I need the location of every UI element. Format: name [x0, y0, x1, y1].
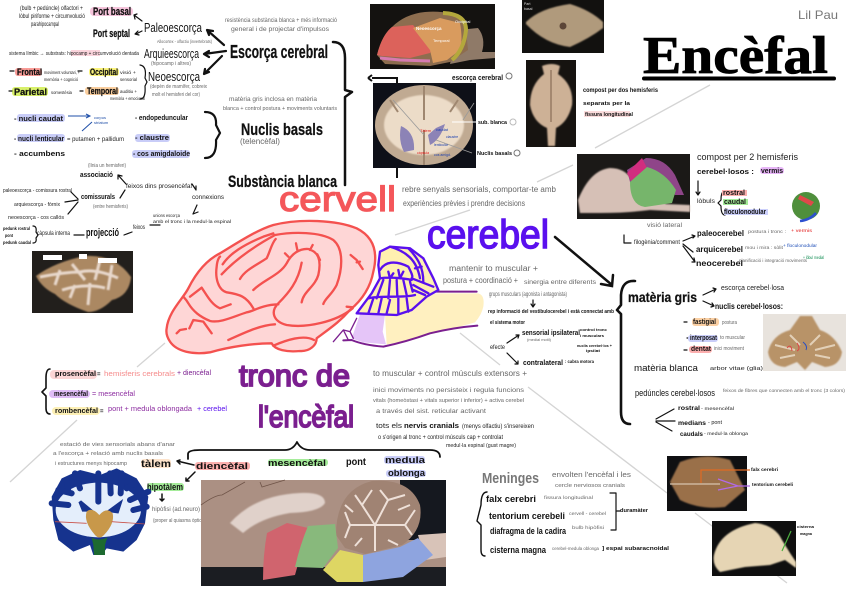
text: cerebel composició: rostral [723, 190, 745, 197]
panel: nuclis basals: - nucli caudat [14, 116, 64, 123]
cerebellum illustration [357, 247, 438, 315]
panel: substància blanca connexions: connexions [192, 195, 224, 201]
image: lateral brain [712, 521, 815, 576]
panel: matèria cerebel: feixos de fibres que connecten amb el tronc (3 colors) [723, 388, 846, 393]
panel: divisions encèfal: mesencèfal [54, 391, 88, 398]
arrow: coronal section connector [368, 75, 397, 178]
panel: escorça cerebral: Paleoescorça [144, 20, 203, 35]
panel: substància blanca connexions: feixos [133, 225, 145, 231]
image: lateral brain cortex colours: Neoescorça [416, 26, 442, 31]
text: filogènia: arquicerebel [696, 244, 743, 254]
panel: escorça cerebral: sistema límbic → substrats: hipocamp + circumvolució dentada [9, 51, 140, 57]
panel: escorça cerebral [9, 6, 338, 101]
panel: substància blanca connexions: paleoescorça - comissura rostral [3, 188, 72, 194]
panel: nuclis basals: = putamen + pallidum [67, 137, 124, 143]
panel: tronc parts: mesencèfal [268, 458, 326, 469]
text: funció cerebel: (medial motil) [527, 337, 552, 342]
panel: divisions encèfal: prosencèfal [55, 371, 96, 378]
panel: substància blanca connexions [3, 163, 337, 245]
panel: escorça cerebral: memòria + cognició [44, 77, 78, 82]
panel: meninges: duramàter [620, 508, 649, 514]
text: funció cerebel: sinergia entre diferents [524, 279, 597, 286]
text: funció cerebel: el sistema motor [490, 320, 526, 326]
text: hemisferis: separats per la [583, 101, 631, 107]
panel: substància blanca connexions: associació [80, 172, 113, 179]
text: funció cerebel: grups musculars (agonista i antagonista) [489, 291, 567, 298]
panel: meninges: diafragma de la cadira [490, 526, 567, 536]
panel: substància blanca connexions: (entre hemisferis) [93, 204, 128, 210]
text: filogènia: mou i mira : sòlit [745, 245, 784, 250]
text: funció cerebel: contralateral [523, 360, 563, 367]
text: hemisferis: fissura longitudinal [585, 112, 633, 118]
panel: meninges [477, 470, 670, 556]
panel: divisions encèfal: = [100, 409, 104, 415]
text: filogènia: + vermis [791, 228, 813, 233]
image: coronal section: claustre [446, 135, 458, 139]
icon: cerebellum model [792, 192, 820, 221]
panel: divisions encèfal: rombencèfal [55, 408, 98, 415]
text: funció tronc: inici moviments no persisteix i regula funcions [373, 387, 525, 394]
image: lateral brain cortex colours: Temporal [433, 38, 450, 43]
brace: tronc divisions [188, 442, 440, 459]
panel: divisions encèfal [42, 369, 227, 415]
image: ventral brain: basal [524, 7, 533, 11]
text: cerebel composició: vermis [761, 168, 783, 175]
image: lateral brain: magna [800, 531, 813, 536]
panel: escorça cerebral: lòbul piriforme + circumvolució [19, 14, 86, 20]
panel: tronc parts: (proper al quiasma òptic) [153, 518, 203, 524]
text: cerebel composició: lòbuls [697, 199, 715, 205]
panel: matèria cerebel: caudals [680, 431, 703, 438]
title: Encèfal [643, 27, 828, 85]
panel: tronc parts: hipotàlem [147, 482, 183, 493]
author credit: Lil Pau [798, 8, 838, 22]
panel: matèria cerebel: - mesencèfal [701, 406, 734, 411]
panel: nuclis basals: - cos amigdaloide [133, 151, 190, 158]
text: cerebel composició: floculonodular [724, 209, 766, 216]
panel: tronc parts: tàlem [141, 459, 171, 470]
panel: divisions encèfal: + diencèfal [177, 370, 211, 377]
panel: nuclis basals: corpus [94, 115, 106, 120]
text: funció cerebel: postura + coordinació + [443, 276, 518, 285]
panel: matèria cerebel: pedúncles cerebel·losos [635, 388, 715, 398]
panel: meninges: fissura longitudinal [544, 495, 593, 500]
panel: matèria cerebel: - pont [708, 420, 723, 426]
panel: meninges: cervell - cerebel [569, 511, 606, 516]
panel: tronc parts: medula [385, 455, 426, 466]
panel: matèria cerebel: to muscular [720, 335, 745, 341]
panel: substància blanca connexions: unions escorça [153, 213, 180, 218]
text: funció cervell: rebre senyals sensorials, comportar-te amb [402, 185, 557, 194]
panel: meninges: Meninges [482, 470, 539, 487]
panel: substància blanca connexions: feixos dins prosencèfal [126, 184, 192, 190]
text: cerebel composició: cerebel·losos : [697, 169, 754, 176]
text: filogènia: paleocerebel [697, 228, 744, 238]
labels: coronal section: Nuclis basals [477, 151, 512, 157]
panel: divisions encèfal: + cerebel [197, 406, 227, 413]
panel: escorça cerebral: sensorial [120, 77, 137, 82]
text: funció tronc: medul·la espinal (gust magre) [446, 443, 516, 449]
panel: substància blanca connexions: (línia un hemisferi) [88, 163, 126, 169]
heading: cervell: cervell [279, 180, 396, 219]
panel: escorça cerebral: molt el hemisferi del cor) [152, 92, 200, 98]
image: ventral brain [522, 0, 604, 53]
panel: escorça cerebral: Arquieescorça [144, 46, 200, 61]
labels: coronal section: sub. blanca [478, 120, 508, 126]
panel: tronc parts: oblonga [388, 468, 426, 479]
panel: nuclis basals: - accumbens [14, 151, 65, 158]
panel: divisions encèfal: = [97, 372, 101, 378]
image: lateral brain cortex colours [370, 4, 495, 69]
panel: escorça cerebral: Parietal [14, 87, 47, 97]
labels: coronal section: escorça cerebral [452, 75, 503, 82]
arrow: cerebel to matèria gris [555, 237, 613, 286]
image: ventral brain: Part [524, 2, 530, 6]
text: funció tronc [373, 369, 534, 449]
panel: substància blanca connexions: comissurals [81, 194, 115, 201]
panel: escorça cerebral: Neoescorça [148, 69, 201, 84]
panel: escorça cerebral: moviment voluntari, + [44, 70, 80, 75]
panel: escorça cerebral: Escorça cerebral [230, 42, 328, 62]
panel: nuclis basals: (telencèfal) [240, 137, 280, 146]
text: cerebel composició: compost per 2 hemisferis [697, 152, 798, 162]
heading: cerebel: cerebel [427, 213, 549, 257]
panel: escorça cerebral: parahipocampal [31, 22, 59, 28]
panel: nuclis basals: matèria gris inclosa en matèria [229, 97, 318, 103]
arrow: bracket to cervell [333, 42, 352, 185]
text: funció cervell: experiències prèvies i prendre decisions [403, 199, 525, 208]
text: filogènia: visió lateral [647, 223, 682, 229]
panel: meninges: envolten l'encèfal i les [552, 472, 632, 479]
panel: divisions encèfal: pont + medula oblongada [108, 406, 192, 413]
text: funció cerebel: rep informació del vestibulocerebel i està connectat amb [488, 309, 615, 315]
text: funció cerebel: i musculars [580, 334, 604, 338]
panel: escorça cerebral: visió + [120, 70, 136, 75]
panel: tronc parts: estació de vies sensorials abans d'anar [60, 442, 175, 448]
image: cerebellum section [763, 314, 846, 371]
text: funció cerebel [443, 264, 615, 367]
text: funció cerebel: : cabra motora [565, 359, 594, 364]
panel: meninges: cercle nerviosos cranials [555, 483, 625, 489]
panel: escorça cerebral: general i de projectar d'impulsos [231, 27, 329, 33]
panel: nuclis basals: Nuclis basals [241, 120, 323, 139]
text: funció cerebel: mantenir to muscular + [449, 264, 538, 273]
text: filogènia: + floculonodular [783, 243, 818, 248]
panel: nuclis basals [14, 97, 337, 158]
panel: matèria cerebel: rostral [678, 405, 700, 412]
text: cerebel composició [696, 152, 798, 216]
panel: escorça cerebral: Frontal [17, 67, 42, 77]
panel: matèria cerebel: fastigial [693, 319, 716, 326]
panel: nuclis basals: - nucli lenticular [14, 136, 64, 143]
panel: tronc parts: pont [346, 457, 367, 468]
heading: tronc de l'encèfal [239, 358, 354, 434]
text: cerebel composició: caudal [724, 199, 746, 206]
text: funció tronc: (menys olfactiu) s'insereixen [462, 423, 534, 430]
panel: substància blanca connexions: pedunk caudal [3, 240, 31, 245]
panel: matèria cerebel: medians [678, 420, 706, 427]
text: funció cerebel: control tronc [580, 328, 607, 332]
heading: tronc de l'encèfal: tronc de [239, 358, 350, 393]
text: funció cerebel: ipsilat [586, 349, 601, 353]
labels: coronal section [452, 73, 520, 157]
text: funció tronc: tots els [376, 423, 403, 430]
panel: matèria cerebel: interposat [690, 335, 718, 342]
panel: tronc parts: diencèfal [196, 461, 248, 472]
panel: escorça cerebral: Port septal [93, 28, 130, 40]
image: dorsal brain [526, 60, 576, 147]
labels: dura: falx cerebri [751, 467, 778, 472]
labels: dura: tentorium cerebeli [752, 482, 793, 487]
panel: nuclis basals: striatum [94, 120, 109, 125]
text: funció tronc: a través del sist. reticular activant [376, 408, 486, 415]
panel: matèria cerebel: escorça cerebel·losa [721, 285, 784, 292]
panel: divisions encèfal: = mesencèfal [92, 391, 135, 398]
panel: meninges: falx cerebri [486, 494, 536, 504]
panel: escorça cerebral: somestèsia [51, 90, 72, 95]
image: coronal section: lenticular [434, 143, 449, 147]
text: hemisferis: compost per dos hemisferis [583, 88, 659, 94]
image: lateral brain cortex colours: Occipital [455, 19, 470, 24]
panel: escorça cerebral: (bulb + pedúncle) olfactori + [20, 6, 83, 12]
panel: matèria cerebel: - medul·la oblonga [704, 431, 749, 436]
image: coronal section [373, 83, 478, 168]
panel: substància blanca connexions: càpsula interna [37, 231, 71, 237]
panel: escorça cerebral: auditiu + [120, 89, 137, 94]
panel: matèria cerebel: arbor vitae (glia) [710, 366, 763, 372]
panel: matèria cerebel: inici moviment [714, 346, 745, 352]
panel: tronc parts [53, 442, 426, 524]
text: funció cerebel: nuclis cerebel·los + [577, 344, 613, 348]
panel: escorça cerebral: resistència substància blanca + més informació [225, 18, 338, 24]
panel: meninges: cisterna magna [490, 545, 547, 555]
brainstem illustration [333, 292, 484, 347]
text: filogènia: + lòbul medial [803, 255, 824, 260]
panel: escorça cerebral: Allocortex - olfactiu (invertebrats) [157, 39, 212, 44]
image: lateral brain: cisterna [797, 524, 815, 529]
panel: divisions encèfal: hemisferis cerebrals [104, 371, 176, 378]
text: funció tronc: vitals (homeòstasi + vitals superior i inferior) + activa cerebel [373, 398, 524, 404]
panel: matèria cerebel [617, 281, 846, 438]
image: coronal section: càpsula [417, 151, 429, 155]
image: sagittal brain section [201, 480, 446, 586]
heading: tronc de l'encèfal: l'encèfal [258, 399, 354, 434]
panel: escorça cerebral: memòria + emocional [110, 96, 145, 101]
panel: substància blanca connexions: projecció [86, 227, 119, 239]
text: funció tronc: nervis cranials [404, 423, 459, 430]
panel: escorça cerebral: (hipocamp i altres) [151, 61, 191, 67]
text: filogènia: planificació i integració moviments [739, 258, 808, 263]
image: horizontal section [32, 251, 133, 313]
panel: matèria cerebel: dentat [691, 346, 712, 353]
panel: meninges: bulb hipòfisi [572, 525, 604, 530]
panel: escorça cerebral: Occipital [90, 67, 118, 77]
panel: matèria cerebel: matèria gris [628, 289, 697, 305]
text: funció tronc: to muscular + control músculs extensors + [373, 369, 527, 378]
panel: tronc parts: a l'escorça + relació amb nuclis basals [53, 451, 163, 457]
text: funció cerebel: efecte [490, 345, 506, 351]
text: filogènia: filogènia/comment [634, 240, 680, 246]
text: funció tronc: o s'origen al tronc + control músculs cap + controlat [378, 435, 503, 441]
text: hemisferis [583, 88, 659, 118]
panel: matèria cerebel: nuclis cerebel·losos: [715, 302, 783, 311]
text: funció cerebel: sensorial ipsilateral [522, 330, 580, 337]
panel: substància blanca connexions: arquiescorça - fòrnix [14, 202, 61, 208]
panel: substància blanca connexions: amb el tronc i la medul·la espinal [153, 219, 231, 224]
image: cerebellum lateral [577, 154, 690, 219]
panel: escorça cerebral: Temporal [87, 86, 118, 96]
panel: tronc parts: i estructures menys hipocamp [55, 461, 127, 467]
panel: substància blanca connexions: pedunk rostral [3, 226, 30, 231]
text: filogènia: postura i tronc : [748, 229, 786, 234]
panel: meninges: ] espai subaracnoidal [602, 546, 670, 552]
panel: nuclis basals: - claustre [135, 135, 169, 142]
image: skull dura [667, 456, 750, 511]
panel: substància blanca connexions: Substància blanca [228, 172, 337, 191]
text: funció cervell [402, 185, 557, 208]
text: filogènia [624, 223, 824, 268]
panel: substància blanca connexions: neoescorça - cos callós [8, 215, 65, 221]
panel: matèria cerebel: postura [722, 320, 737, 326]
panel: escorça cerebral: Port basal [93, 6, 131, 18]
text: filogènia: neocerebel [696, 258, 743, 268]
panel: nuclis basals: blanca + control postura + moviments voluntaris [223, 106, 337, 112]
panel: nuclis basals: - endopeduncular [135, 115, 188, 122]
labels: dura [751, 467, 793, 487]
image: coronal MRI [52, 468, 148, 555]
image: coronal section: cos amigd. [434, 153, 451, 157]
panel: meninges: cerebel-medula oblonga [552, 546, 599, 551]
brain illustration [166, 221, 375, 353]
panel: meninges: tentorium cerebeli [489, 511, 565, 521]
image: coronal section: Tàlem [420, 128, 432, 133]
image: coronal section: caudat [436, 127, 449, 132]
panel: escorça cerebral: (depèn de mamífer, cobreix [150, 84, 207, 90]
panel: tronc parts: hipòfisi (ad.neuro) [152, 506, 200, 513]
panel: matèria cerebel: matèria blanca [634, 363, 698, 373]
panel: substància blanca connexions: pont [5, 233, 13, 238]
